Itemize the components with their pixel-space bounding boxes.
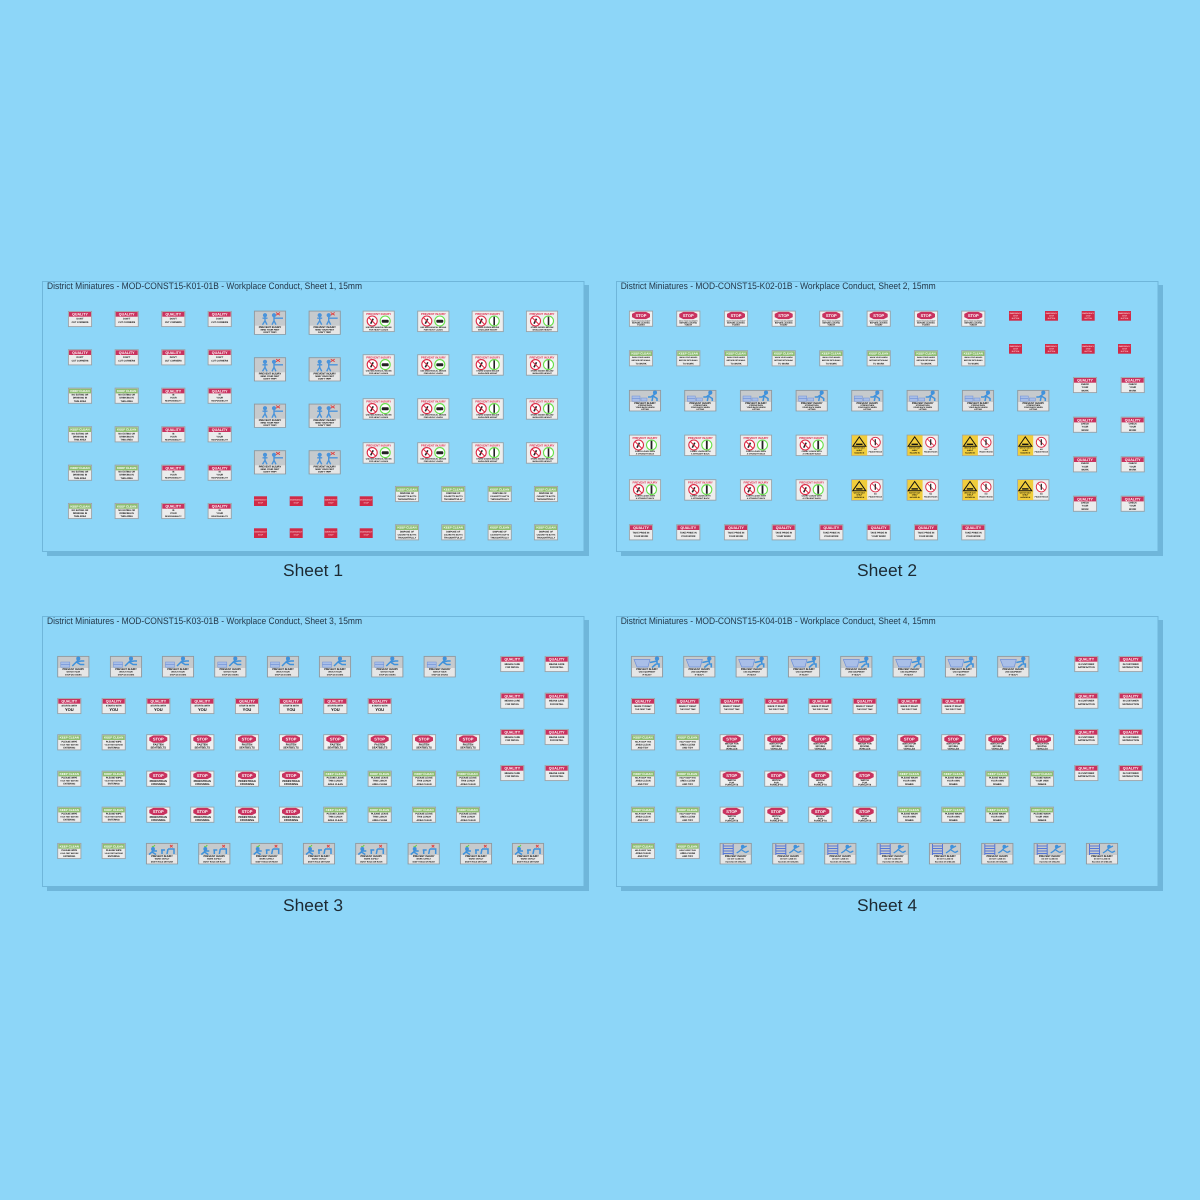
signs: prevent injury, work safely (146, 843, 544, 864)
signs: quality, take pride in your work (629, 525, 985, 540)
signs: keep clean, wash your hands (629, 351, 985, 366)
panel: sheet 4 (616, 615, 1163, 891)
signs: keep clean, area tidy (631, 735, 699, 859)
signs: quality, check your work (1073, 377, 1144, 511)
signs: quality means care for detail (501, 656, 568, 781)
signs: emergency stop labels (254, 496, 373, 538)
caption: sheet 3: Sheet 3 (283, 896, 343, 915)
signs: emergency stop button labels (1009, 311, 1131, 354)
signs: yellow warning, no pedestrians (852, 435, 1049, 500)
signs: stop, pedestrian crossing (147, 771, 303, 822)
panel: sheet 1 (42, 280, 589, 556)
panel: sheet 2 (616, 280, 1163, 556)
signs: quality is customer satisfaction (1075, 656, 1142, 781)
signs: quality starts with you (58, 698, 391, 714)
heading: sheet 3 title: District Miniatures - MOD-CONST15-K03-01B - Workplace Conduct, Sheet 3, 15mm (47, 615, 362, 626)
heading: sheet 4 title: District Miniatures - MOD-CONST15-K04-01B - Workplace Conduct, Sheet 4, 15mm (621, 615, 936, 626)
signs: quality is your responsibility (162, 388, 231, 519)
signs: prevent injury, carry loads (629, 435, 827, 500)
signs: keep clean, wipe your feet (58, 735, 125, 859)
signs: prevent injury, ladder racking (720, 843, 1118, 864)
caption: sheet 4: Sheet 4 (857, 896, 917, 915)
signs: stop, fasten seatbelts (147, 735, 480, 750)
signs: prevent injury, use equipment (631, 656, 1029, 677)
panel: sheet 3 (42, 615, 589, 891)
signs: stop, forklifts (720, 771, 876, 823)
signs: stop row (629, 311, 985, 327)
caption: sheet 1: Sheet 1 (283, 561, 343, 580)
signs: quality, make it right (631, 698, 965, 714)
heading: sheet 1 title: District Miniatures - MOD-CONST15-K01-01B - Workplace Conduct, Sheet 1, 15mm (47, 280, 362, 291)
signs: stop, moving vehicles (720, 735, 1054, 750)
signs: prevent injury, lifting (629, 390, 1049, 411)
caption: sheet 2: Sheet 2 (857, 561, 917, 580)
signs: keep clean, wash dishes (898, 771, 1054, 822)
signs: prevent injury, store goods (472, 311, 558, 463)
signs: keep clean, lunch area (324, 771, 480, 822)
heading: sheet 2 title: District Miniatures - MOD-CONST15-K02-01B - Workplace Conduct, Sheet 2, 15mm (621, 280, 936, 291)
signs: quality, don't cut corners (68, 311, 231, 365)
signs: prevent injury, mechanical means (363, 311, 449, 463)
signs: keep clean, no eating or drinking (68, 388, 138, 519)
signs: prevent injury, mind your feet (254, 311, 340, 474)
signs: keep clean, cigarette butts (395, 486, 558, 540)
signs: prevent injury, stairs (58, 656, 455, 677)
